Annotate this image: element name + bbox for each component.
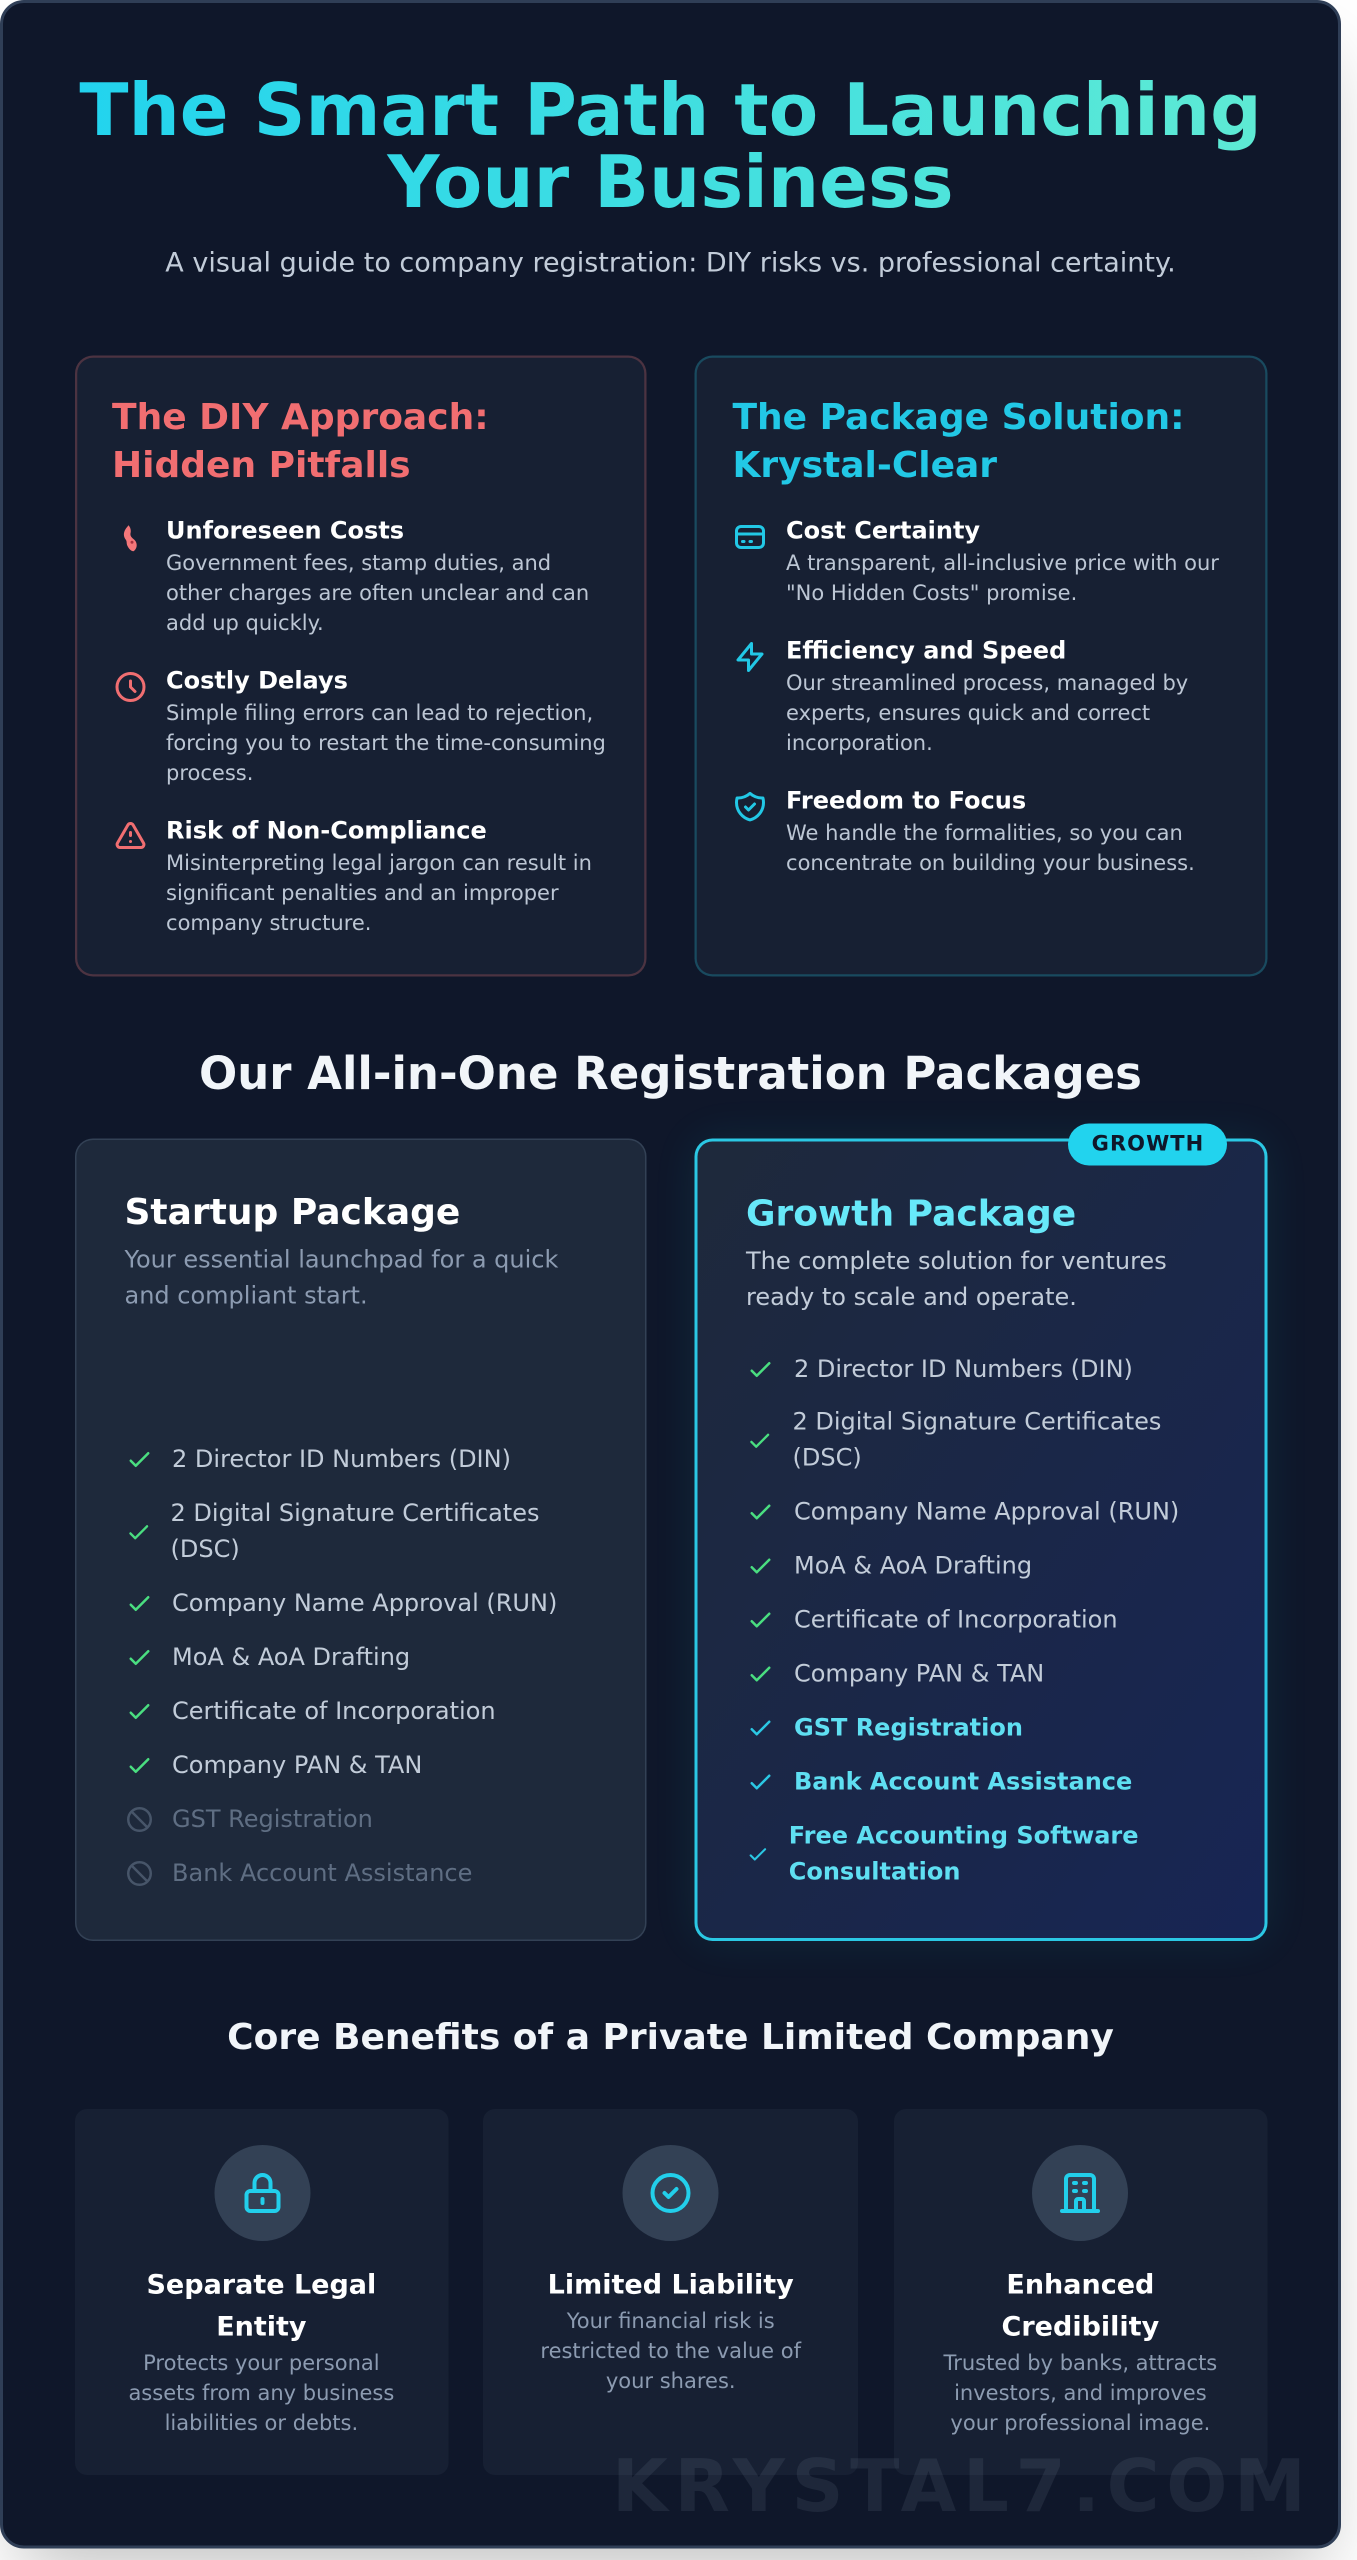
item heading: Freedom to Focus xyxy=(786,786,1026,814)
check icon xyxy=(750,1362,771,1378)
feature: GST excluded: GST Registration xyxy=(172,1805,373,1833)
item text: We handle the formalities, so you can xyxy=(786,822,1183,846)
package description: and compliant start. xyxy=(124,1281,368,1309)
feature: DIN: 2 Director ID Numbers (DIN) xyxy=(172,1445,511,1473)
item text: Misinterpreting legal jargon can result in xyxy=(166,852,592,876)
feature: accounting: Free Accounting Software xyxy=(789,1821,1139,1850)
panel heading xyxy=(112,396,489,486)
ban icon xyxy=(127,1807,152,1832)
feature: RUN: Company Name Approval (RUN) xyxy=(794,1497,1179,1526)
benefit text xyxy=(75,2349,448,2439)
item text xyxy=(786,822,1195,876)
benefit text: liabilities or debts. xyxy=(165,2412,358,2436)
panel heading: Hidden Pitfalls xyxy=(112,444,411,486)
feature: accounting xyxy=(789,1818,1139,1890)
item text xyxy=(786,672,1188,756)
benefit text: assets from any business xyxy=(128,2382,394,2406)
benefit text: Protects your personal xyxy=(143,2352,380,2376)
benefit heading: Entity xyxy=(216,2311,307,2343)
item text: Government fees, stamp duties, and xyxy=(166,552,551,576)
badge xyxy=(1068,1124,1227,1166)
item heading: Risk of Non-Compliance xyxy=(166,816,487,844)
check icon xyxy=(750,1558,771,1574)
panel heading: The DIY Approach: xyxy=(112,396,489,438)
feature: DSC: 2 Digital Signature Certificates xyxy=(792,1408,1161,1436)
check icon xyxy=(129,1650,150,1666)
item heading: Unforeseen Costs xyxy=(166,516,404,544)
benefit card: credibility xyxy=(893,2109,1268,2475)
item heading: Efficiency and Speed xyxy=(786,636,1066,664)
benefit heading xyxy=(75,2265,448,2349)
icon: check circle xyxy=(623,2145,719,2241)
ban icon xyxy=(127,1861,152,1886)
icon: lock xyxy=(214,2145,310,2241)
panel: DIY approach xyxy=(75,356,647,976)
feature: bank: Bank Account Assistance xyxy=(794,1767,1132,1796)
icon: dollar blob xyxy=(124,525,137,552)
item text: experts, ensures quick and correct xyxy=(786,702,1150,726)
package description: The complete solution for ventures xyxy=(746,1246,1167,1274)
item text xyxy=(166,702,606,786)
item heading: Costly Delays xyxy=(166,666,348,694)
item text xyxy=(786,552,1219,606)
benefit text xyxy=(483,2307,858,2397)
subtitle: A visual guide to company registration: DIY risks vs. professional certainty. xyxy=(165,248,1176,279)
feature: PAN: Company PAN & TAN xyxy=(172,1751,422,1779)
item text xyxy=(166,852,592,936)
panel heading: The Package Solution: xyxy=(732,396,1185,438)
benefit text: Trusted by banks, attracts xyxy=(944,2352,1217,2376)
benefit heading: Enhanced xyxy=(1006,2269,1154,2301)
panel heading: Krystal-Clear xyxy=(732,444,997,486)
feature: DIN: 2 Director ID Numbers (DIN) xyxy=(794,1354,1133,1382)
feature: GST: GST Registration xyxy=(794,1713,1023,1742)
check icon xyxy=(750,1504,771,1520)
item text: Simple filing errors can lead to rejection, xyxy=(166,702,593,726)
item text: incorporation. xyxy=(786,732,933,756)
icon: building xyxy=(1032,2145,1128,2241)
item: cost certainty xyxy=(735,516,1219,606)
item: unforeseen costs xyxy=(124,516,589,636)
panel: package solution xyxy=(695,356,1268,976)
item text: process. xyxy=(166,762,253,786)
feature: certificate: Certificate of Incorporation xyxy=(172,1697,496,1725)
item text: "No Hidden Costs" promise. xyxy=(786,582,1077,606)
panel: growth package xyxy=(695,1138,1268,1941)
icon: lightning bolt xyxy=(736,642,764,672)
icon: credit card xyxy=(735,525,765,549)
title xyxy=(75,75,1266,219)
benefit heading: Credibility xyxy=(1002,2311,1159,2343)
icon: warning xyxy=(116,822,146,849)
feature: DSC xyxy=(171,1499,539,1563)
check icon xyxy=(129,1596,150,1612)
feature: DSC: (DSC) xyxy=(792,1444,862,1472)
item text: company structure. xyxy=(166,912,371,936)
benefit heading: Separate Legal xyxy=(146,2269,376,2301)
check icon xyxy=(750,1774,771,1790)
package title: Startup Package xyxy=(124,1191,460,1233)
feature: certificate: Certificate of Incorporation xyxy=(794,1605,1118,1634)
title: The Smart Path to Launching xyxy=(79,69,1262,153)
item text: A transparent, all-inclusive price with our xyxy=(786,552,1219,576)
check icon xyxy=(750,1720,771,1736)
feature: RUN: Company Name Approval (RUN) xyxy=(172,1589,557,1617)
panel: startup package xyxy=(75,1138,647,1941)
benefit card: legal entity xyxy=(75,2109,448,2475)
item text: other charges are often unclear and can xyxy=(166,582,589,606)
item text: add up quickly. xyxy=(166,612,324,636)
check icon xyxy=(129,1758,150,1774)
benefit text xyxy=(893,2349,1268,2439)
feature: bank excluded: Bank Account Assistance xyxy=(172,1859,472,1887)
item text: forcing you to restart the time-consuming xyxy=(166,732,606,756)
feature: MoA: MoA & AoA Drafting xyxy=(172,1643,410,1671)
section heading: benefits: Core Benefits of a Private Limited Company xyxy=(227,2016,1114,2058)
benefit card: limited liability xyxy=(483,2109,858,2475)
check icon xyxy=(129,1704,150,1720)
item: efficiency xyxy=(736,636,1188,756)
benefit heading xyxy=(893,2265,1268,2349)
watermark: KRYSTAL7.COM xyxy=(612,2444,1313,2528)
feature: PAN: Company PAN & TAN xyxy=(794,1659,1044,1688)
feature: accounting: Consultation xyxy=(789,1857,960,1886)
package description xyxy=(746,1246,1167,1310)
package description: ready to scale and operate. xyxy=(746,1282,1077,1310)
benefit text: investors, and improves xyxy=(954,2382,1207,2406)
badge: GROWTH xyxy=(1092,1132,1204,1156)
feature: MoA: MoA & AoA Drafting xyxy=(794,1551,1032,1580)
benefit text: Your financial risk is xyxy=(567,2310,775,2334)
icon: shield check xyxy=(735,792,765,822)
package description: Your essential launchpad for a quick xyxy=(124,1245,558,1273)
benefit text: your shares. xyxy=(606,2370,736,2394)
title: Your Business xyxy=(387,141,954,225)
check icon xyxy=(750,1666,771,1682)
check icon xyxy=(129,1452,150,1468)
feature: DSC: (DSC) xyxy=(171,1535,240,1563)
package description xyxy=(124,1245,558,1309)
item text: concentrate on building your business. xyxy=(786,852,1195,876)
check icon xyxy=(746,1842,771,1867)
feature: DSC xyxy=(792,1408,1161,1472)
item text: significant penalties and an improper xyxy=(166,882,559,906)
section heading: packages: Our All-in-One Registration Packages xyxy=(199,1048,1142,1101)
benefit text: restricted to the value of xyxy=(540,2340,801,2364)
item: costly delays xyxy=(116,666,606,786)
panel heading xyxy=(732,396,1185,486)
item: freedom xyxy=(735,786,1195,876)
icon: clock xyxy=(116,672,146,702)
benefit text: your professional image. xyxy=(950,2412,1210,2436)
item text xyxy=(166,552,589,636)
check icon xyxy=(129,1525,148,1540)
feature: DSC: 2 Digital Signature Certificates xyxy=(171,1499,539,1527)
check icon xyxy=(750,1434,770,1448)
item text: Our streamlined process, managed by xyxy=(786,672,1188,696)
item heading: Cost Certainty xyxy=(786,516,980,544)
item: non-compliance xyxy=(116,816,592,936)
benefit heading: Limited Liability xyxy=(548,2269,794,2301)
check icon xyxy=(750,1612,771,1628)
package title: Growth Package xyxy=(746,1192,1076,1234)
